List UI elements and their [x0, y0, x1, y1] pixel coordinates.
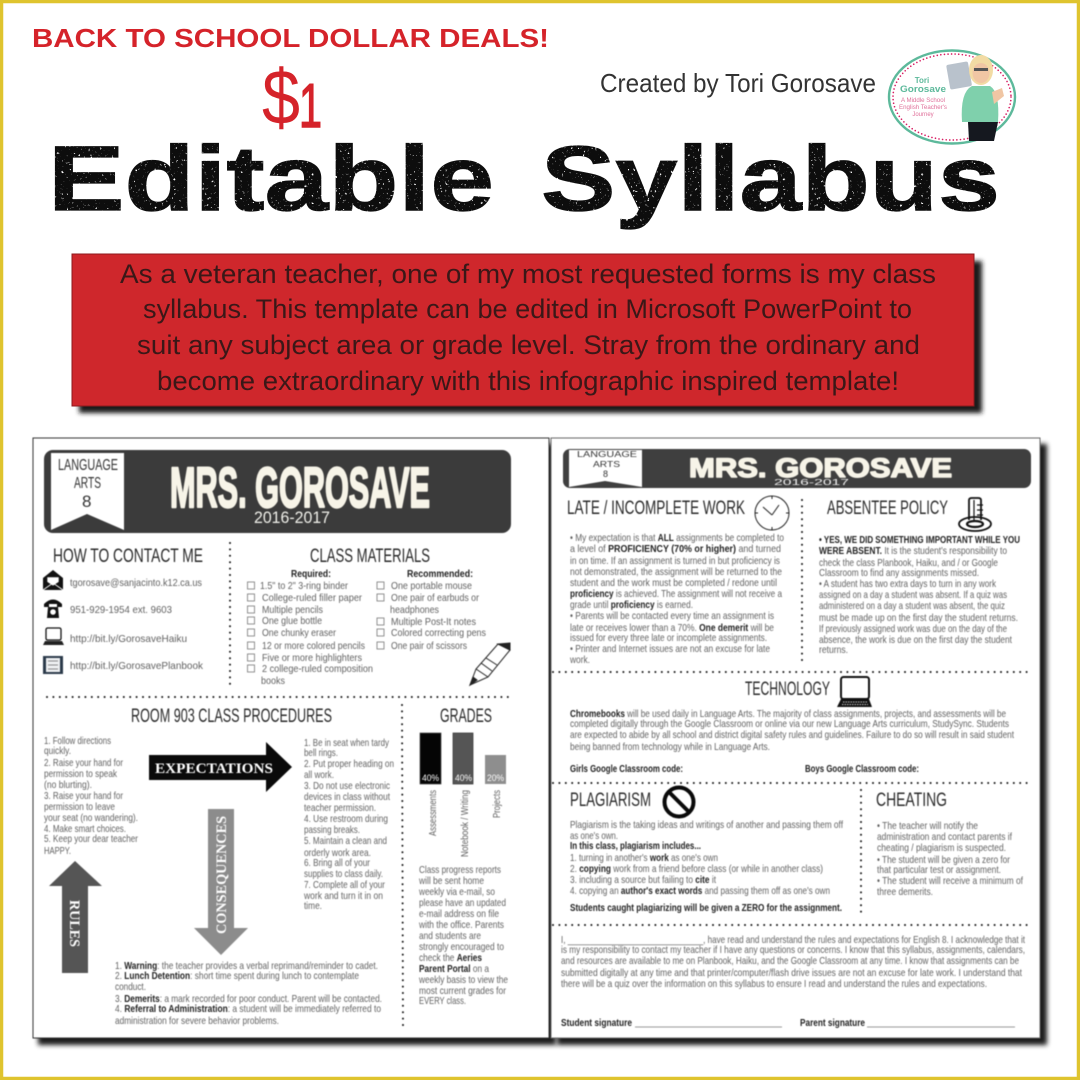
text: consequences list: 2. Lunch Detention: short time spent during lunch to contemplate: [115, 970, 359, 982]
list: required materials: Five or more highlighters: [262, 652, 362, 664]
text: classroom codes: Girls Google Classroom code:: [570, 763, 683, 775]
panel: syllabus page one: [33, 438, 556, 1045]
text: cheating policy: • The student will receive a minimum of: [877, 875, 1023, 887]
text: rules list: 2. Raise your hand for: [44, 757, 123, 769]
icon: laptop: [837, 677, 872, 707]
text: plagiarism policy: 4. copying an author's exact words and passing them off as one's own: [570, 885, 830, 897]
text: grades note: weekly via e-mail, so: [418, 886, 495, 898]
heading: room 903 class procedures: ROOM 903 CLASS PROCEDURES: [131, 706, 332, 727]
text: plagiarism policy: as one's own.: [570, 830, 618, 842]
text: consequences list: administration for severe behavior problems.: [115, 1015, 279, 1027]
icon: thermometer: [959, 498, 991, 531]
list: recommended materials: [377, 568, 486, 652]
bar chart: grade weights: 20%: [487, 773, 504, 784]
text: rules list: permission to leave: [44, 801, 115, 813]
signature lines: [561, 1017, 1015, 1029]
page one header banner: LANGUAGE: [58, 457, 118, 474]
bar chart: grade weights: [420, 733, 506, 857]
page one header banner: [44, 450, 511, 533]
text: cheating policy: • The teacher will notify the: [877, 820, 978, 832]
arrow: consequences: [194, 809, 248, 955]
text: email address: tgorosave@sanjacinto.k12.ca.us: [70, 577, 202, 589]
page two header banner: ARTS: [593, 459, 620, 469]
text: cheating policy: three demerits.: [877, 886, 933, 898]
panel: red description box: become extraordinary with this infographic inspired template!: [157, 366, 899, 396]
text: plagiarism policy: 1. turning in another's work as one's own: [570, 852, 718, 864]
text: late work policy: • Parents will be contacted every time an assignment is: [570, 610, 774, 622]
list: recommended materials: Colored correcting pens: [391, 627, 486, 639]
text: rules list: 1. Follow directions: [44, 735, 111, 747]
heading: how to contact me: HOW TO CONTACT ME: [53, 546, 203, 567]
text: expectations list: all work.: [304, 769, 334, 781]
arrow: expectations: [149, 742, 292, 792]
text: grades note: please have an updated: [419, 897, 506, 909]
heading: grades: GRADES: [440, 706, 492, 727]
page two header banner: [563, 449, 1031, 488]
text: late work policy: [569, 532, 784, 666]
text: expectations list: 5. Maintain a clean and: [304, 835, 387, 847]
text: rules list: 4. Make smart choices.: [44, 823, 126, 835]
text: absentee policy: check the class Planbook, Haiku, and / or Google: [819, 557, 998, 569]
text: late work policy: not demonstrated, the assignment will be returned to the: [570, 566, 782, 578]
page two header banner: LANGUAGE: [577, 449, 637, 459]
text: grades note: e-mail address on file: [419, 908, 499, 920]
text: plagiarism policy: 3. including a source but failing to cite it: [570, 874, 716, 886]
text: expectations list: 1. Be in seat when tardy: [304, 737, 390, 749]
text: technology policy: being banned from technology while in Language Arts.: [570, 741, 770, 753]
bar chart: grade weights: Projects: [491, 790, 503, 818]
text: absentee policy: • A student has two extra days to turn in any work: [819, 578, 997, 590]
text: expectations list: 3. Do not use electronic: [304, 780, 390, 792]
arrow: expectations: EXPECTATIONS: [155, 761, 273, 777]
text: acknowledgement: [561, 934, 1025, 990]
text: grades note: EVERY class.: [419, 995, 466, 1007]
text: late work policy: grade until proficiency is earned.: [570, 599, 693, 611]
text: late work policy: • Printer and Internet issues are not an excuse for late: [570, 643, 770, 655]
text: absentee policy: absence, the work is due on the first day the student: [819, 634, 1012, 646]
text: rules list: HAPPY.: [44, 845, 71, 857]
list: required materials: One glue bottle: [262, 615, 322, 627]
text: absentee policy: assigned on a day a student was absent. If a quiz was: [819, 589, 1007, 601]
page one header banner: 2016-2017: [254, 508, 330, 527]
text: late work policy: student and the work must be completed / redone until: [570, 577, 777, 589]
arrow: rules: [49, 861, 102, 973]
price: 1: [299, 72, 322, 141]
list: required materials: books: [261, 675, 285, 687]
main title: Editable: [48, 128, 494, 230]
heading: plagiarism: PLAGIARISM: [570, 790, 651, 811]
text: grades note: [418, 864, 508, 1007]
list: recommended materials: One pair of scissors: [391, 640, 467, 652]
heading: absentee policy: ABSENTEE POLICY: [827, 498, 948, 519]
text: classroom codes: [570, 763, 919, 775]
list: recommended materials: Multiple Post-It notes: [391, 616, 476, 628]
bar chart: grade weights: Notebook / Writing: [459, 790, 471, 857]
icon: clipboard: [43, 656, 63, 674]
list: required materials: Multiple pencils: [262, 604, 323, 616]
page one header banner: 8: [82, 492, 91, 511]
text: late work policy: late or receives lower than a 70%. One demerit will be: [570, 622, 774, 634]
text: expectations list: work and turn it in on: [303, 890, 383, 902]
text: Haiku link: http://bit.ly/GorosaveHaiku: [70, 633, 187, 645]
heading: class materials: CLASS MATERIALS: [310, 546, 430, 567]
text: expectations list: bell rings.: [304, 747, 338, 759]
text: cheating policy: cheating / plagiarism is suspected.: [877, 842, 1006, 854]
list: required materials: College-ruled filler paper: [262, 592, 362, 604]
text: rules list: 5. Keep your dear teacher: [44, 833, 138, 845]
panel: syllabus page two: [551, 438, 1047, 1045]
bar chart: grade weights: 40%: [422, 773, 439, 784]
text: consequences list: [115, 960, 382, 1027]
text: grades note: with the office. Parents: [418, 919, 504, 931]
text: expectations list: supplies to class daily.: [304, 868, 383, 880]
main title: [48, 128, 1000, 230]
text: expectations list: passing breaks.: [304, 824, 360, 836]
text: rules list: your seat (no wandering).: [44, 812, 138, 824]
text: late work policy: a level of PROFICIENCY (70% or higher) and turned: [570, 543, 781, 555]
icon: clock: [755, 496, 789, 530]
icon: telephone: [44, 600, 62, 618]
logo: Tori Gorosave badge: Tori: [915, 76, 929, 85]
text: cheating policy: that particular test or assignment.: [877, 864, 1001, 876]
bar chart: grade weights: 40%: [455, 773, 472, 784]
list: recommended materials: Recommended:: [407, 568, 473, 580]
list: recommended materials: One pair of earbuds or: [391, 592, 479, 604]
logo: Tori Gorosave badge: A Middle School: [901, 98, 945, 104]
list: required materials: 1.5" to 2" 3-ring binder: [260, 580, 348, 592]
text: expectations list: orderly work area.: [304, 847, 371, 859]
list: required materials: One chunky eraser: [262, 627, 336, 639]
text: grades note: most current grades for: [419, 985, 506, 997]
text: consequences list: 3. Demerits: a mark recorded for poor conduct. Parent will be contacted.: [115, 993, 382, 1005]
text: rules list: quickly.: [44, 745, 71, 757]
text: grades note: Parent Portal on a: [419, 963, 489, 975]
text: expectations list: 7. Complete all of your: [304, 879, 385, 891]
text: grades note: and students are: [419, 930, 481, 942]
logo: Tori Gorosave badge: Journey: [912, 112, 934, 118]
page two header banner: 2016-2017: [774, 477, 849, 487]
list: required materials: Required:: [291, 568, 331, 580]
logo: Tori Gorosave badge: Gorosave: [900, 84, 946, 94]
text: late work policy: in on time. If an assignment is turned in but proficiency is: [570, 555, 780, 567]
text: late work policy: proficiency is achieved. The assignment will not receive a: [570, 588, 782, 600]
text: rules list: (no blurting).: [44, 779, 92, 791]
list: required materials: [248, 568, 373, 687]
text: consequences list: 4. Referral to Administration: a student will be immediately referred to: [115, 1003, 381, 1015]
bar chart: grade weights: Assessments: [427, 790, 439, 836]
text: cheating policy: administration and contact parents if: [877, 831, 1012, 843]
text: absentee policy: must be made up on the first day the student returns.: [819, 612, 1018, 624]
page two header banner: 8: [603, 469, 608, 479]
page one header banner: MRS. GOROSAVE: [170, 456, 430, 520]
text: grades note: weekly basis to view the: [418, 974, 508, 986]
list: recommended materials: One portable mouse: [391, 580, 472, 592]
text: phone number: 951-929-1954 ext. 9603: [70, 604, 172, 616]
text: absentee policy: administered on a day a student was absent, the quiz: [819, 600, 1005, 612]
text: cheating policy: [877, 820, 1023, 898]
list: required materials: 12 or more colored pencils: [262, 640, 365, 652]
icon: pencil: [470, 643, 510, 685]
page two header banner: MRS. GOROSAVE: [689, 453, 952, 483]
text: expectations list: time.: [304, 900, 322, 912]
text: absentee policy: • YES, WE DID SOMETHING IMPORTANT WHILE YOU: [819, 534, 1020, 546]
text: expectations list: 6. Bring all of your: [304, 857, 370, 869]
text: plagiarism policy: [570, 819, 843, 914]
text: plagiarism policy: Plagiarism is the taking ideas and writings of another and passing them off: [570, 819, 843, 831]
text: rules list: permission to speak: [44, 768, 118, 780]
signature lines: Parent signature: [800, 1017, 865, 1029]
text: consequences list: 1. Warning: the teacher provides a verbal reprimand/reminder to cadet.: [115, 960, 378, 972]
panel: red description box: [72, 254, 982, 413]
icon: laptop: [43, 628, 64, 645]
text: absentee policy: [819, 534, 1020, 656]
panel: red description box: suit any subject area or grade level. Stray from the ordinary and: [137, 330, 920, 360]
text: absentee policy: returns.: [819, 644, 848, 656]
arrow: rules: RULES: [66, 900, 82, 947]
author credit: Created by Tori Gorosave: [600, 68, 876, 98]
text: late work policy: issued for every three late or incomplete assignments.: [570, 632, 767, 644]
panel: red description box: syllabus. This template can be edited in Microsoft PowerPoint to: [143, 294, 912, 324]
text: grades note: check the Aeries: [419, 952, 482, 964]
price: $: [262, 53, 300, 141]
logo: Tori Gorosave badge: English Teacher's: [899, 105, 947, 111]
text: technology policy: [570, 708, 1014, 753]
text: absentee policy: Classroom to find any assignments missed.: [819, 567, 979, 579]
text: absentee policy: If previously assigned work was due on the day of the: [819, 623, 1007, 635]
text: cheating policy: • The student will be given a zero for: [877, 854, 1010, 866]
text: expectations list: 4. Use restroom during: [304, 813, 388, 825]
text: expectations list: devices in class without: [304, 791, 390, 803]
text: grades note: strongly encouraged to: [419, 941, 504, 953]
text: Planbook link: http://bit.ly/GorosavePlanbook: [70, 660, 204, 672]
heading: technology: TECHNOLOGY: [745, 679, 830, 700]
text: late work policy: • My expectation is that ALL assignments be completed to: [570, 532, 784, 544]
heading: cheating: CHEATING: [876, 790, 947, 811]
text: classroom codes: Boys Google Classroom code:: [805, 763, 919, 775]
text: plagiarism policy: In this class, plagiarism includes...: [570, 840, 701, 852]
promo heading: BACK TO SCHOOL DOLLAR DEALS!: [32, 23, 549, 53]
text: absentee policy: WERE ABSENT. It is the student's responsibility to: [819, 545, 1007, 557]
text: plagiarism policy: Students caught plagiarizing will be given a ZERO for the assignment.: [570, 902, 842, 914]
main title: Syllabus: [541, 128, 1000, 230]
text: expectations list: 2. Put proper heading on: [304, 758, 394, 770]
icon: envelope: [43, 570, 63, 590]
text: grades note: Class progress reports: [419, 864, 501, 876]
logo: Tori Gorosave badge: [889, 50, 1015, 144]
heading: late / incomplete work: LATE / INCOMPLETE WORK: [567, 498, 745, 519]
text: rules list: 3. Raise your hand for: [44, 790, 123, 802]
page one header banner: ARTS: [74, 475, 101, 492]
list: required materials: 2 college-ruled composition: [262, 663, 373, 675]
text: consequences list: conduct.: [115, 981, 146, 993]
text: grades note: will be sent home: [418, 875, 484, 887]
text: late work policy: work.: [569, 654, 590, 666]
signature lines: Student signature: [561, 1017, 632, 1029]
arrow: consequences: CONSEQUENCES: [214, 816, 230, 934]
list: recommended materials: headphones: [390, 604, 439, 616]
icon: prohibited sign: [664, 788, 694, 816]
text: expectations list: teacher permission.: [304, 802, 376, 814]
panel: red description box: As a veteran teacher, one of my most requested forms is my class: [120, 259, 936, 289]
text: plagiarism policy: 2. copying work from a friend before class (or while in another class): [570, 863, 823, 875]
text: expectations list: [303, 737, 394, 912]
text: rules list: [44, 735, 138, 857]
